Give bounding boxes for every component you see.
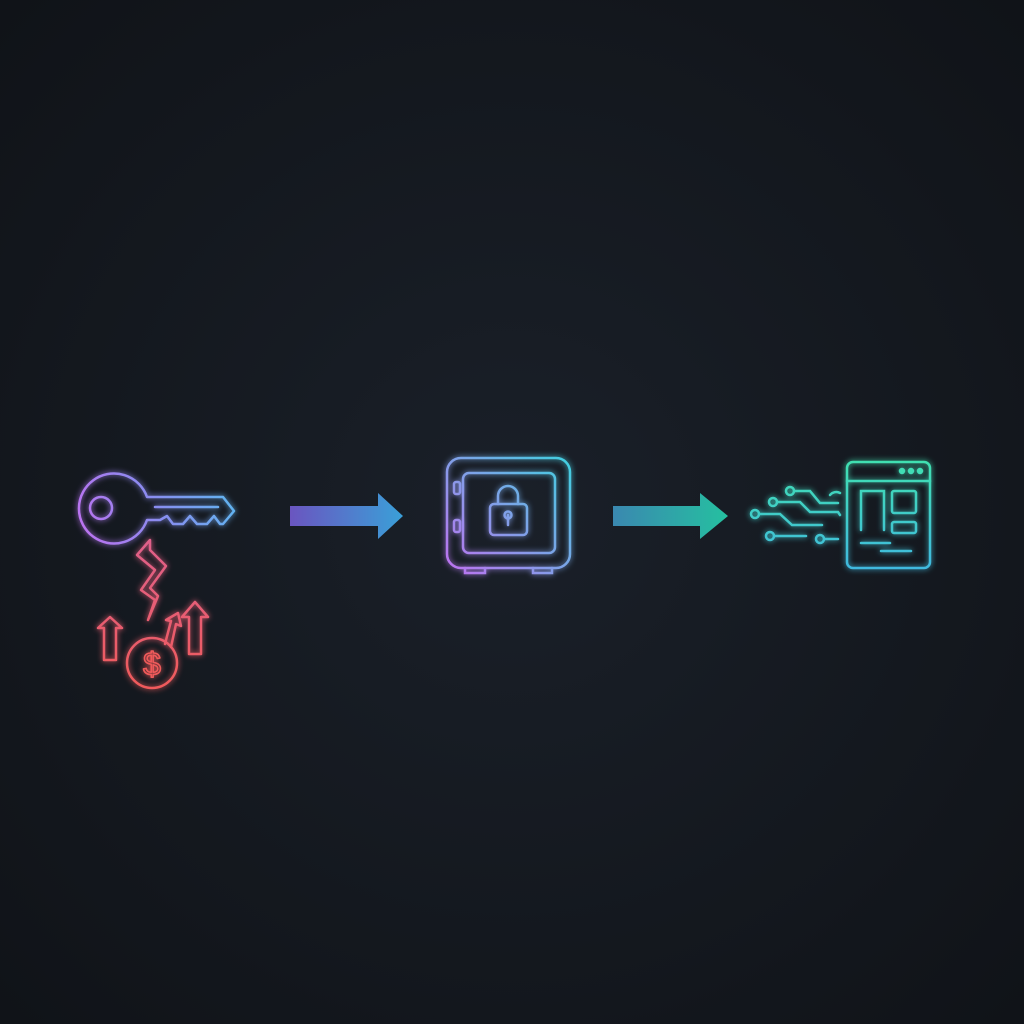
icon: browser with data circuits bbox=[751, 462, 930, 568]
icon: key with price spike bbox=[79, 474, 234, 688]
arrow 1 bbox=[290, 493, 403, 539]
icon: safe with lock bbox=[447, 458, 570, 573]
arrow 2 bbox=[613, 493, 728, 539]
crack and money arrows bbox=[98, 540, 208, 688]
key bbox=[79, 474, 234, 544]
crack and money arrows: $ bbox=[143, 646, 161, 682]
